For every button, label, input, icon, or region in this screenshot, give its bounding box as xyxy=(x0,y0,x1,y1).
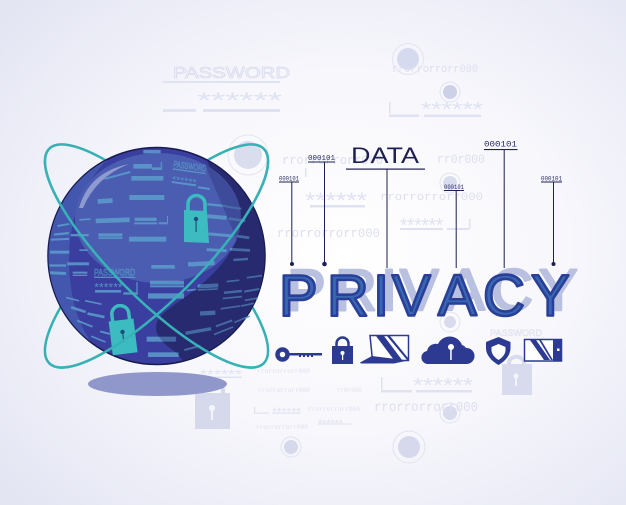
faint code strings: rrorrorrorr000 xyxy=(256,424,308,431)
globe data strings xyxy=(49,150,262,357)
faint padlock left xyxy=(195,380,230,429)
faint star strings and bars xyxy=(178,99,542,430)
faint code strings: rrorrorrorr000 xyxy=(392,64,478,76)
faint code strings xyxy=(256,64,485,431)
globe highlight xyxy=(75,153,241,283)
globe password label upper xyxy=(171,159,213,191)
label stem 1 xyxy=(279,176,299,266)
faint padlock right xyxy=(502,357,532,395)
faint circle nodes xyxy=(228,44,460,463)
faint code strings: rrorrorrorr000 xyxy=(308,406,360,413)
orbit rings behind globe xyxy=(19,118,294,394)
faint code strings: rr0r000 xyxy=(437,152,485,167)
faint star strings and bars: PASSWORD xyxy=(490,328,542,338)
label stem 1: 000101 xyxy=(279,176,299,182)
faint star strings and bars: ****** xyxy=(413,375,473,397)
shine arc xyxy=(79,164,129,208)
data title: DATA xyxy=(351,143,419,168)
label stem 3 xyxy=(444,184,464,268)
faint code strings: rrorrorrorr000 xyxy=(258,387,310,394)
label stem 4: 000101 xyxy=(484,140,517,150)
faint password block xyxy=(163,65,290,113)
faint star strings and bars: ****** xyxy=(421,99,483,121)
label stem 2: 000101 xyxy=(308,155,335,163)
privacy title xyxy=(279,258,578,328)
faint password block: PASSWORD xyxy=(173,65,290,82)
label stem 5: 000101 xyxy=(541,176,562,182)
faint code strings: rr0r000 xyxy=(337,387,362,394)
label stem 5 xyxy=(541,176,562,266)
faint code strings: rrorrorrorr000 xyxy=(282,153,383,168)
faint code strings: rrorrorrorr000 xyxy=(380,192,483,204)
title lettering: PRIVACY xyxy=(279,264,570,328)
faint star strings and bars: ****** xyxy=(400,215,443,237)
icon: cloud xyxy=(421,336,475,364)
globe xyxy=(45,140,578,370)
icon: tablet xyxy=(524,339,562,361)
faint star strings and bars: ****** xyxy=(272,405,301,419)
faint code strings: rrorrorrorr000 xyxy=(257,368,310,375)
padlock upper xyxy=(184,196,209,243)
icon row xyxy=(278,336,562,365)
faint background pattern xyxy=(163,44,542,463)
label stem 3: 000101 xyxy=(444,184,464,191)
faint code strings: rrorrorrorr000 xyxy=(277,226,380,241)
globe body xyxy=(48,148,265,364)
faint star strings and bars: ****** xyxy=(305,188,368,213)
globe password label lower: ****** xyxy=(94,281,123,295)
faint code strings: rrorrorrorr000 xyxy=(374,400,478,416)
faint password block: ****** xyxy=(197,88,283,113)
faint star strings and bars: ****** xyxy=(318,418,344,430)
faint star strings and bars: ****** xyxy=(200,366,243,382)
globe password label lower xyxy=(94,267,138,295)
label stem 4 xyxy=(484,140,518,268)
globe ground shadow xyxy=(88,372,227,396)
globe password label upper: ****** xyxy=(171,175,197,189)
data connector lines xyxy=(279,140,562,268)
globe dark crescent xyxy=(156,160,264,360)
globe password label upper: PASSWORD xyxy=(173,159,208,174)
orbit rings in front of globe xyxy=(45,149,268,368)
data title xyxy=(346,143,425,268)
globe code bars xyxy=(49,150,262,357)
label stem 2 xyxy=(308,155,335,266)
icon: key xyxy=(278,350,322,360)
globe password label lower: PASSWORD xyxy=(94,267,136,277)
dimming over dark crescent xyxy=(159,165,262,356)
icon: shield xyxy=(486,337,510,365)
padlock lower xyxy=(107,304,138,355)
left rim light xyxy=(48,159,108,354)
icon: laptop xyxy=(360,336,408,364)
icon: padlock xyxy=(332,338,353,364)
title shadow: PRIVACY xyxy=(287,258,578,323)
